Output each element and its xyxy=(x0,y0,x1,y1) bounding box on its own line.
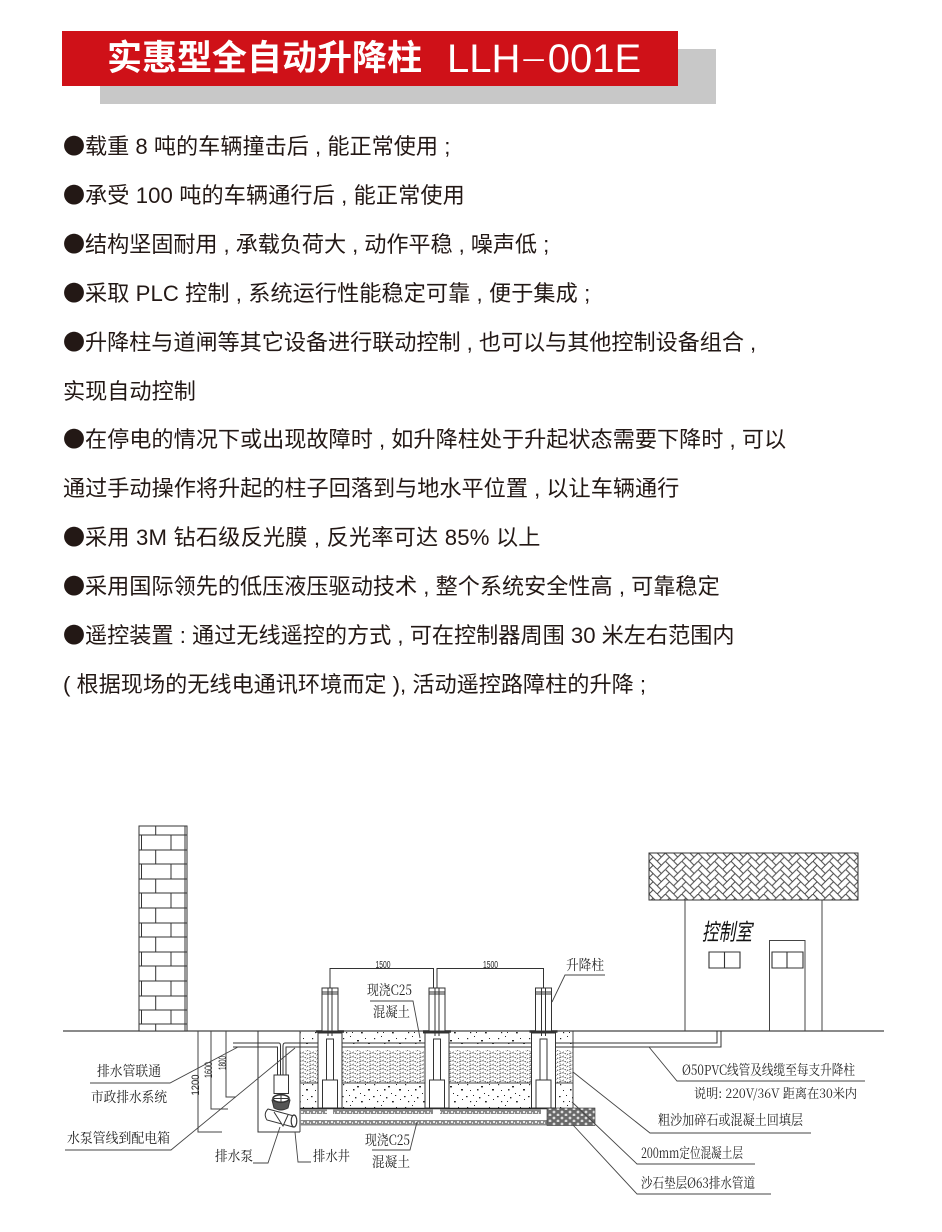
feature list: 采取 PLC 控制 , 系统运行性能稳定可靠 , 便于集成 ; xyxy=(85,281,590,306)
label: gravel bed: 沙石垫层Ø63排水管道 xyxy=(641,1173,755,1193)
label: cast concrete upper: 现浇C25 xyxy=(367,980,412,1000)
control room label: 控制室 xyxy=(702,913,754,947)
title banner xyxy=(62,31,716,104)
feature list: ● xyxy=(63,422,85,454)
feature list: ● xyxy=(63,520,85,552)
label: backfill: 粗沙加碎石或混凝土回填层 xyxy=(658,1110,803,1130)
ground line xyxy=(63,1030,884,1032)
spacing dimensions xyxy=(330,960,544,988)
diagram labels xyxy=(67,955,857,1193)
feature list: ● xyxy=(63,618,85,650)
label: drain pipe connection: 排水管联通 xyxy=(97,1061,161,1081)
feature list: ● xyxy=(63,569,85,601)
feature list: 承受 100 吨的车辆通行后 , 能正常使用 xyxy=(85,183,465,208)
feature list: ( 根据现场的无线电通讯环境而定 ), 活动遥控路障柱的升降 ; xyxy=(63,672,646,697)
walls xyxy=(685,900,822,1031)
feature list: 遥控装置 : 通过无线遥控的方式 , 可在控制器周围 30 米左右范围内 xyxy=(85,623,734,648)
drainage well and depth dimensions xyxy=(190,1031,300,1132)
label: positioning concrete: 200mm定位混凝土层 xyxy=(641,1143,743,1163)
feature list: ● xyxy=(63,178,85,210)
feature list: ● xyxy=(63,129,85,161)
label: conduit: Ø50PVC线管及线缆至每支升降柱 xyxy=(682,1060,855,1080)
feature list xyxy=(63,129,786,697)
label: cast concrete lower: 现浇C25 xyxy=(365,1130,410,1150)
wall window xyxy=(709,952,740,968)
feature list: 载重 8 吨的车辆撞击后 , 能正常使用 ; xyxy=(85,134,450,159)
feature list: 实现自动控制 xyxy=(63,379,196,404)
title text: 实惠型全自动升降柱 xyxy=(107,39,422,78)
gravel block xyxy=(547,1108,595,1126)
banner grey shadow xyxy=(100,49,716,104)
dimension 1500 left: 1500 xyxy=(376,960,391,971)
feature list: 采用国际领先的低压液压驱动技术 , 整个系统安全性高 , 可靠稳定 xyxy=(85,574,720,599)
label: concrete lower: 混凝土 xyxy=(372,1152,410,1172)
door xyxy=(770,940,805,1031)
brick wall xyxy=(139,826,187,1031)
label: municipal drainage: 市政排水系统 xyxy=(91,1087,167,1107)
bollard 3 xyxy=(530,988,558,1108)
feature list: ● xyxy=(63,227,85,259)
label: pump line to box: 水泵管线到配电箱 xyxy=(67,1128,170,1148)
label: bollard: 升降柱 xyxy=(566,955,604,975)
dimension 1500 right: 1500 xyxy=(483,960,498,971)
lower concrete xyxy=(300,1083,573,1108)
label: concrete upper: 混凝土 xyxy=(373,1002,410,1022)
bollard 2 xyxy=(423,988,451,1108)
label: pump: 排水泵 xyxy=(215,1146,253,1166)
title banner: LLH 001E xyxy=(447,37,641,81)
feature list: ● xyxy=(63,276,85,308)
feature list: ● xyxy=(63,325,85,357)
door window xyxy=(772,952,803,968)
roof xyxy=(649,853,858,900)
leader lines xyxy=(65,975,865,1194)
positioning concrete strips xyxy=(300,1110,547,1126)
feature list: 采用 3M 钻石级反光膜 , 反光率可达 85% 以上 xyxy=(85,525,541,550)
drainage pump xyxy=(265,1075,297,1127)
title text xyxy=(107,37,641,81)
title banner: - xyxy=(520,47,548,71)
top concrete xyxy=(300,1032,573,1044)
banner red block xyxy=(62,31,678,86)
feature list: 结构坚固耐用 , 承载负荷大 , 动作平稳 , 噪声低 ; xyxy=(85,232,549,257)
label: well: 排水井 xyxy=(313,1146,350,1166)
label: note: 说明: 220V/36V 距离在30米内 xyxy=(694,1083,857,1102)
control room xyxy=(649,853,858,1031)
depth 1200: 1200 xyxy=(190,1074,202,1096)
sand and gravel backfill xyxy=(300,1050,573,1083)
depth 1600: 1600 xyxy=(203,1062,215,1078)
feature list: 在停电的情况下或出现故障时 , 如升降柱处于升起状态需要下降时 , 可以 xyxy=(85,427,786,452)
underground fill layers xyxy=(300,1031,595,1132)
bollard 1 xyxy=(316,988,344,1108)
depth 1800: 1800 xyxy=(217,1056,229,1070)
feature list: 升降柱与道闸等其它设备进行联动控制 , 也可以与其他控制设备组合 , xyxy=(85,330,756,355)
cable conduit xyxy=(233,1031,721,1075)
feature list: 通过手动操作将升起的柱子回落到与地水平位置 , 以让车辆通行 xyxy=(63,476,679,501)
